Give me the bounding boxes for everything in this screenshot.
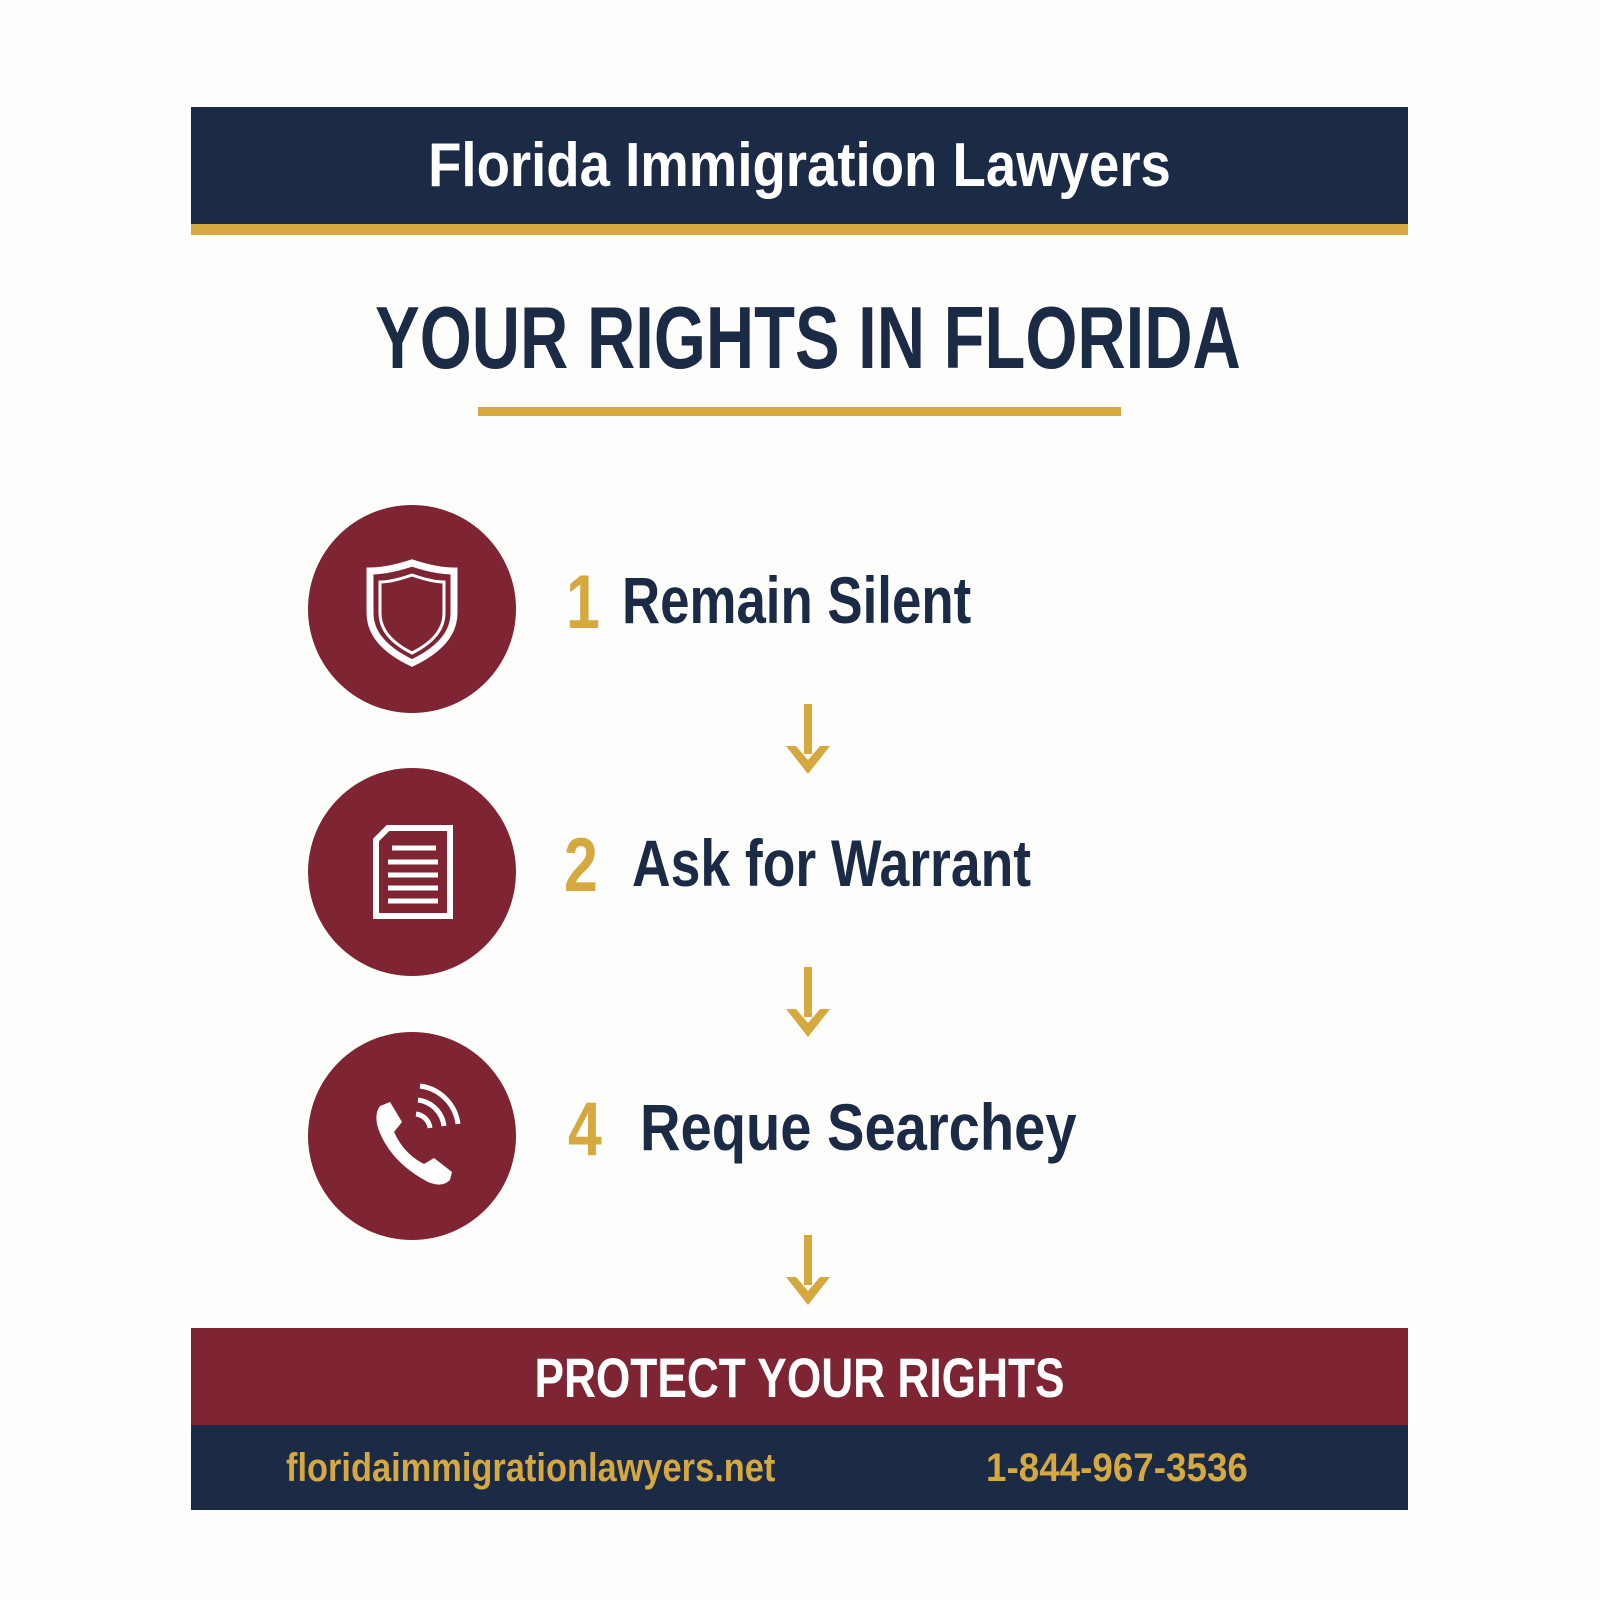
step 2 [308,768,1031,976]
label: Ask for Warrant [632,826,1031,900]
footer red banner [191,1328,1408,1425]
phone: 1-844-967-3536 [986,1446,1248,1490]
number 4: 4 [568,1087,602,1172]
step 3 [308,1032,1077,1240]
gold line under header [191,224,1408,235]
icon: document [308,768,516,976]
banner text: PROTECT YOUR RIGHTS [534,1346,1065,1409]
arrow [786,967,830,1037]
number 1: 1 [566,560,600,645]
number 2: 2 [564,823,598,908]
arrow [786,1235,830,1305]
header text: Florida Immigration Lawyers [428,131,1171,200]
icon: shield [308,505,516,713]
footer contact bar [191,1425,1408,1510]
label: Reque Searchey [640,1090,1077,1164]
title underline [478,407,1121,416]
step 1 [308,505,971,713]
label: Remain Silent [622,563,971,637]
title: YOUR RIGHTS IN FLORIDA [375,288,1241,387]
icon: phone [308,1032,516,1240]
header bar [191,107,1408,224]
website: floridaimmigrationlawyers.net [286,1446,775,1490]
arrow [786,704,830,774]
